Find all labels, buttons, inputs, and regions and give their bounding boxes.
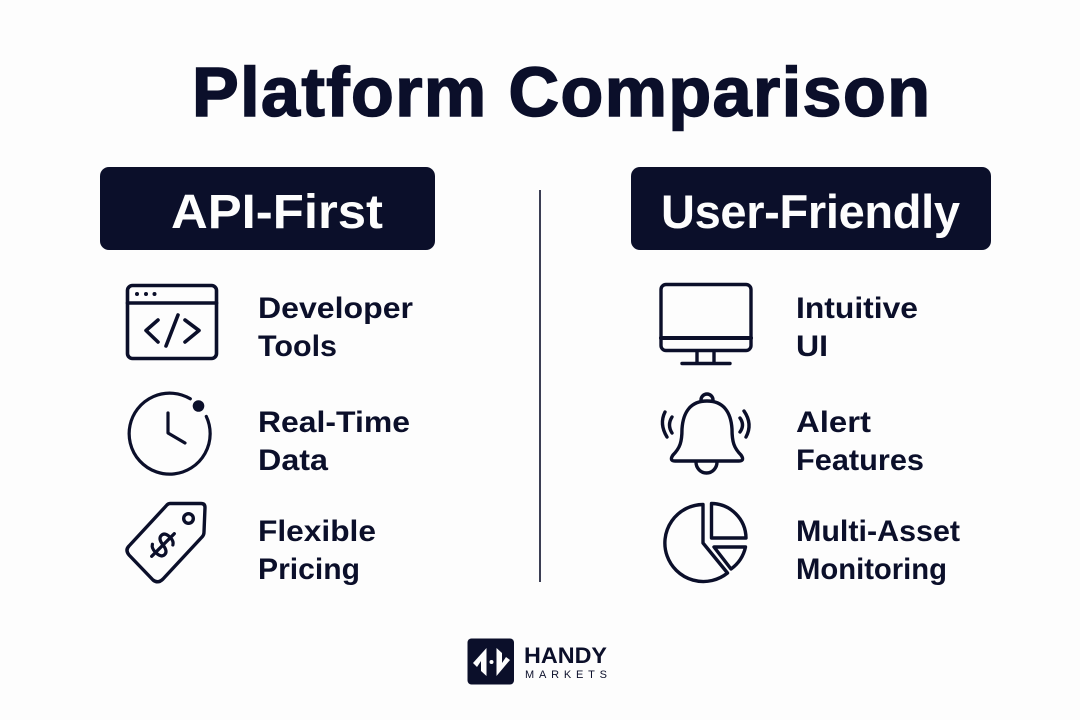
label: Alert Features: Alert	[796, 406, 871, 439]
label: Multi-Asset Monitoring	[796, 515, 960, 586]
label: Intuitive UI: UI	[796, 330, 828, 363]
label: Flexible Pricing	[258, 515, 376, 586]
label: Developer Tools: Developer	[258, 292, 414, 325]
icon: monitor	[661, 284, 751, 364]
icon: pie chart	[665, 504, 746, 581]
label: Multi-Asset Monitoring: Monitoring	[796, 553, 947, 586]
label: Alert Features: Features	[796, 444, 924, 477]
label: Developer Tools: Tools	[258, 330, 337, 363]
logo: Handy Markets	[468, 638, 607, 684]
label: Real-Time Data	[258, 406, 410, 477]
wordmark: HANDY	[524, 643, 607, 668]
heading: User-Friendly: User-Friendly	[661, 185, 960, 238]
heading: API-First	[100, 167, 435, 250]
label: Flexible Pricing: Pricing	[258, 553, 360, 586]
icon: clock	[129, 393, 210, 474]
label: Intuitive UI: Intuitive	[796, 292, 918, 325]
icon: price tag	[127, 504, 205, 582]
label: Developer Tools	[258, 292, 414, 363]
panel: User-Friendly column	[631, 167, 991, 586]
label: Real-Time Data: Data	[258, 444, 329, 477]
icon: developer tools window	[128, 286, 216, 358]
center divider	[539, 190, 541, 582]
logo mark	[468, 638, 514, 684]
heading: User-Friendly	[631, 167, 991, 250]
label: Alert Features	[796, 406, 924, 477]
label: Multi-Asset Monitoring: Multi-Asset	[796, 515, 960, 548]
icon: bell	[662, 394, 749, 473]
label: Intuitive UI	[796, 292, 918, 363]
label: Real-Time Data: Real-Time	[258, 406, 410, 439]
heading: API-First: API-First	[171, 186, 383, 239]
wordmark: MARKETS	[525, 669, 607, 681]
wordmark	[524, 643, 607, 681]
panel: API-First column	[100, 167, 435, 586]
label: Flexible Pricing: Flexible	[258, 515, 376, 548]
title: Platform Comparison	[192, 53, 930, 131]
